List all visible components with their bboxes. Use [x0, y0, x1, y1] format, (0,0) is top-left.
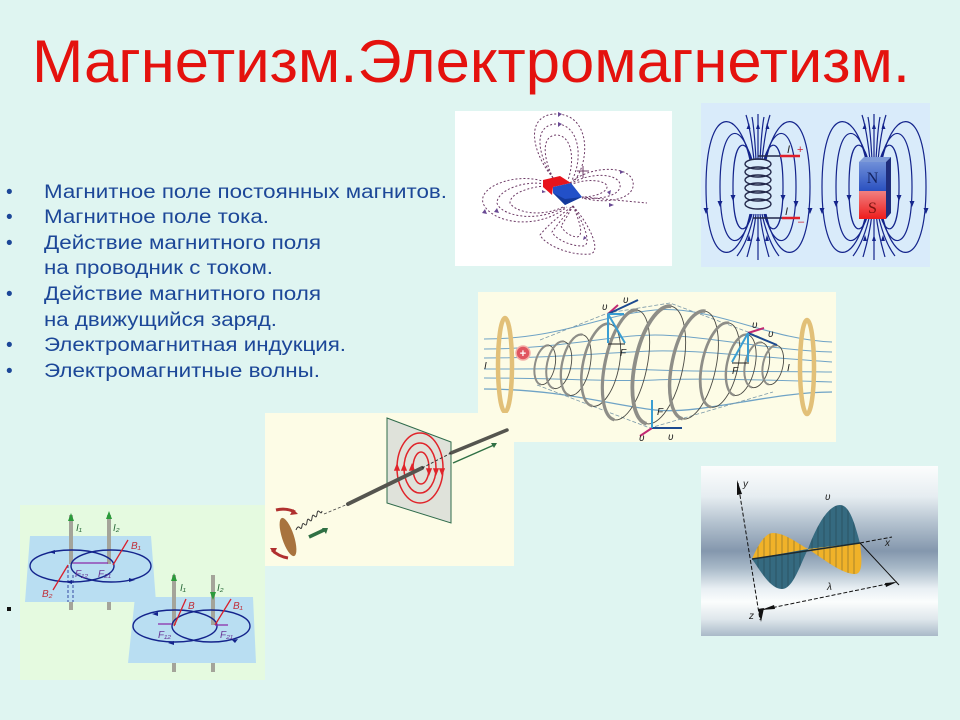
positive charge: + [520, 348, 526, 360]
bullet list of topics: Магнитное поле постоянных магнитов. [44, 182, 447, 203]
vector labels: υ [602, 302, 608, 313]
axes and wavelength arrow [737, 480, 899, 622]
force and induction vectors [53, 540, 231, 626]
conductors [71, 515, 213, 672]
wave lobes [752, 505, 861, 589]
positive charge [516, 346, 530, 360]
title: Магнетизм.Электромагнетизм. [32, 28, 910, 95]
plus mark [577, 166, 589, 178]
current arrows and labels: + [797, 144, 803, 156]
panel: interaction of parallel currents [20, 505, 265, 680]
concentric field circles [395, 433, 444, 503]
bar magnet [859, 157, 891, 219]
field loops [30, 550, 250, 645]
axis labels: z [748, 611, 754, 622]
vector labels: F₁₂ [158, 630, 171, 641]
current arrows and labels: – [798, 216, 805, 228]
helix thick front arcs [531, 301, 777, 424]
left blue plane [25, 536, 156, 602]
vector labels: B₁ [131, 541, 141, 552]
vector labels: F [732, 366, 739, 377]
vector labels: υ [752, 320, 758, 331]
panel: electromagnetic wave [701, 466, 938, 636]
vector labels: I₂ [113, 523, 120, 534]
current arrows and labels [780, 144, 805, 228]
axis labels [742, 479, 891, 622]
vector labels: I₁ [76, 523, 82, 534]
vector labels: υ [639, 433, 645, 444]
vector labels: υ [768, 329, 774, 340]
solenoid field lines [704, 114, 812, 260]
bullet list of topics: на движущийся заряд. [44, 310, 277, 331]
bullet list of topics: • [6, 335, 13, 356]
bullet list of topics [6, 182, 447, 382]
solenoid coil [745, 156, 796, 218]
bullet list of topics: • [6, 284, 13, 305]
vector labels: υ [668, 432, 674, 443]
arrowheads on field lines [482, 112, 624, 240]
magnetic field lines [484, 310, 832, 411]
bullet list of topics: • [6, 233, 13, 254]
axis labels: y [742, 479, 749, 490]
vector labels: B₂ [42, 589, 53, 600]
current arrows and labels: I [785, 206, 788, 218]
vector labels [42, 523, 243, 641]
bullet list of topics: • [6, 361, 13, 382]
axis labels: x [884, 538, 891, 549]
bullet list of topics: Электромагнитные волны. [44, 361, 320, 382]
vector labels: F [620, 348, 627, 359]
panel: magnetic field of a straight current [265, 413, 514, 566]
vector labels: F₂₁ [220, 630, 233, 641]
rotation arrows [270, 509, 298, 558]
axis labels: υ [825, 492, 831, 503]
bar magnet: S [868, 200, 877, 217]
vector labels: I₂ [217, 583, 224, 594]
bullet list of topics: на проводник с током. [44, 258, 273, 279]
handle with spring [276, 504, 348, 558]
axis labels: λ [826, 582, 832, 593]
current arrows and labels: I [787, 144, 790, 156]
helix hull dashed [537, 303, 773, 428]
panel: charge spiralling in magnetic field [478, 292, 836, 444]
magnet block [543, 176, 582, 205]
bullet list of topics: Магнитное поле тока. [44, 207, 269, 228]
bar magnet: N [867, 170, 879, 187]
vector labels: I₁ [180, 583, 186, 594]
vector labels: I [787, 363, 790, 374]
end coils [498, 318, 814, 414]
stray bullet dot [7, 607, 11, 611]
conductor dashed inner part [422, 453, 451, 468]
vector labels: F [657, 407, 664, 418]
vector labels [484, 295, 790, 444]
right blue plane [128, 597, 256, 663]
bullet list of topics: • [6, 207, 13, 228]
vector labels: I [484, 361, 487, 372]
bar magnet field lines [820, 114, 928, 260]
current arrows [309, 443, 497, 537]
wave hatching [758, 505, 854, 589]
vector labels: B [188, 601, 195, 612]
panel: permanent magnet field [455, 111, 672, 266]
vector labels: υ [623, 295, 629, 306]
panel: solenoid and bar magnet field [701, 103, 930, 267]
force and velocity vectors [608, 300, 777, 436]
bullet list of topics: • [6, 182, 13, 203]
vector labels: F₁₂ [75, 569, 88, 580]
bullet list of topics: Действие магнитного поля [44, 233, 321, 254]
bullet list of topics: Электромагнитная индукция. [44, 335, 346, 356]
vector labels: F₂₁ [98, 569, 111, 580]
conductor rod upper part [451, 430, 507, 453]
vector labels: B₁ [233, 601, 243, 612]
current arrows [68, 511, 216, 600]
helix path of charge [531, 301, 787, 429]
field plane [387, 418, 451, 523]
wave axis [752, 543, 860, 559]
field lines around magnet [483, 114, 647, 254]
conductor rod lower part [348, 468, 422, 504]
bullet list of topics: Действие магнитного поля [44, 284, 321, 305]
